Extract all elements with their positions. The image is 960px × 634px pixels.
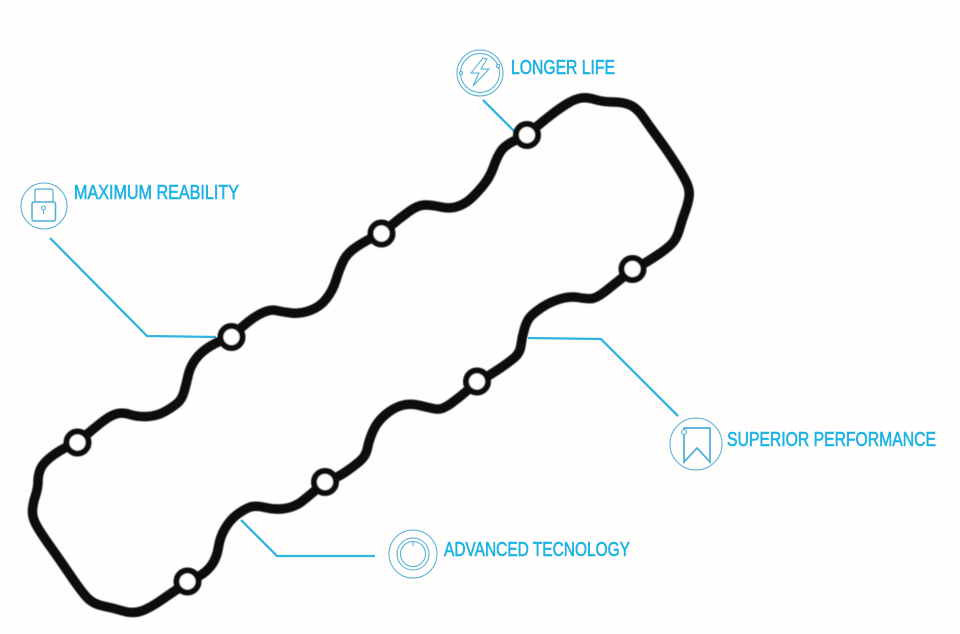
icon: bookmark [670, 418, 722, 470]
callout: longer life [457, 50, 615, 96]
callout: advanced tecnology [389, 530, 630, 578]
icon: padlock [21, 183, 67, 229]
callout: superior performance [670, 418, 936, 470]
label: LONGER LIFE [511, 57, 615, 79]
callout: maximum reability [21, 182, 239, 229]
label: ADVANCED TECNOLOGY [444, 539, 630, 561]
icon: lightning bolt [457, 50, 503, 96]
icon: concentric dial [389, 530, 437, 578]
gasket outline [32, 98, 689, 612]
label: MAXIMUM REABILITY [74, 182, 239, 204]
leader lines [50, 100, 678, 556]
